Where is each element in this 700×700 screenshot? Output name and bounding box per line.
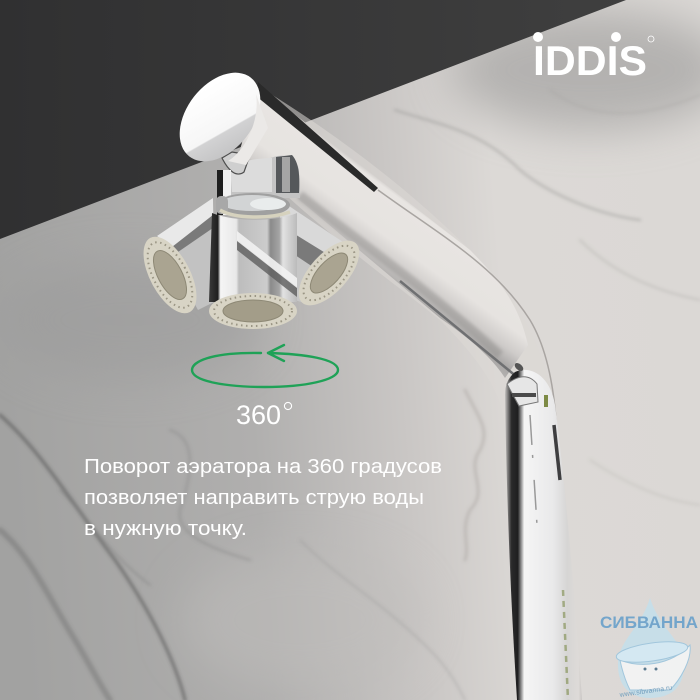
top wall disc: [163, 57, 277, 177]
description text: в нужную точку.: [84, 517, 247, 540]
joint collar: [507, 361, 548, 407]
watermark: Sibvanna: www.sibvanna.ru: [618, 685, 673, 699]
aerator unit: [133, 57, 370, 329]
aerator face right: [288, 231, 370, 315]
right rotated aerator body: [280, 200, 355, 305]
dark upper wall: [0, 0, 626, 239]
angle label: 360: [236, 400, 281, 430]
description text: [84, 455, 442, 540]
watermark: Sibvanna: СИБВАННА: [600, 613, 698, 632]
holder: [230, 156, 300, 198]
watermark: Sibvanna: [600, 598, 698, 699]
chrome pipe: [240, 82, 582, 700]
description text: Поворот аэратора на 360 градусов: [84, 455, 442, 478]
description text: позволяет направить струю воды: [84, 486, 424, 509]
aerator face center: [209, 293, 297, 329]
aerator face left: [133, 229, 207, 321]
swivel ring: [216, 193, 290, 217]
left rotated aerator body: [157, 198, 218, 310]
central body: [209, 213, 297, 302]
swivel neck: [222, 152, 250, 174]
logo: iddis: IDDIS: [533, 37, 647, 84]
rotation arrow: [192, 345, 338, 387]
